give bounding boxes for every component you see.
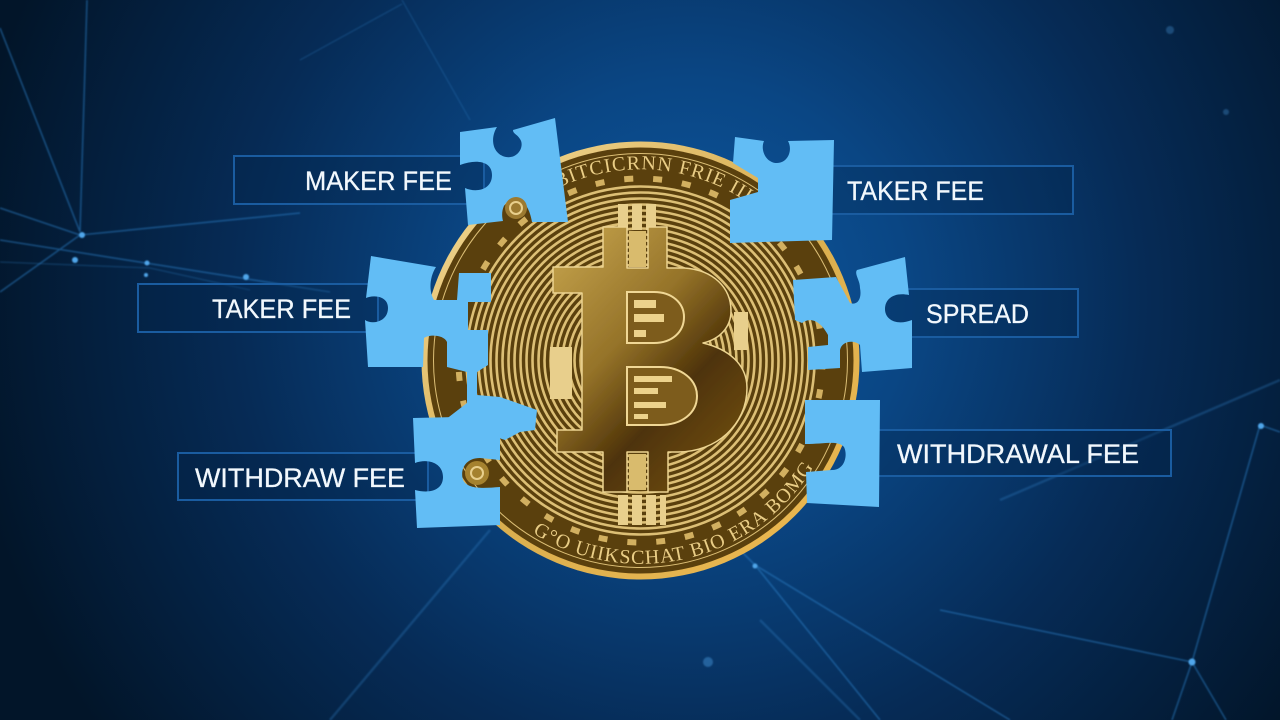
puzzle piece: spread	[793, 257, 912, 372]
label box: spread: SPREAD	[926, 299, 1029, 329]
puzzle piece: taker fee left	[365, 256, 537, 440]
puzzle piece: withdrawal fee	[805, 400, 880, 507]
label box: maker fee: MAKER FEE	[305, 166, 452, 196]
puzzle piece: maker fee	[460, 118, 568, 225]
puzzle piece: withdraw fee	[413, 416, 500, 528]
label box: taker fee left	[138, 284, 378, 332]
label box: spread	[880, 289, 1078, 337]
coin engraved text	[535, 156, 812, 564]
label box: taker fee left: TAKER FEE	[212, 294, 351, 324]
label box: withdraw fee: WITHDRAW FEE	[195, 463, 405, 493]
bitcoin coin	[422, 142, 860, 580]
coin engraved text: G°O UIIKSCHAT BIO ERA BOMG	[535, 462, 812, 564]
label box: maker fee	[234, 156, 484, 204]
coin fragment: gold knob by withdraw piece	[465, 461, 489, 485]
bitcoin B symbol	[553, 227, 747, 492]
coin hatch blocks	[550, 204, 748, 525]
label box: withdrawal fee	[860, 430, 1171, 476]
coin fragment: gold knob by maker piece	[505, 197, 527, 219]
label box: withdrawal fee: WITHDRAWAL FEE	[897, 439, 1139, 469]
label box: withdraw fee	[178, 453, 428, 500]
label box: taker fee right	[734, 166, 1073, 214]
label box: taker fee right: TAKER FEE	[847, 176, 984, 206]
puzzle piece: taker fee right	[730, 137, 834, 243]
